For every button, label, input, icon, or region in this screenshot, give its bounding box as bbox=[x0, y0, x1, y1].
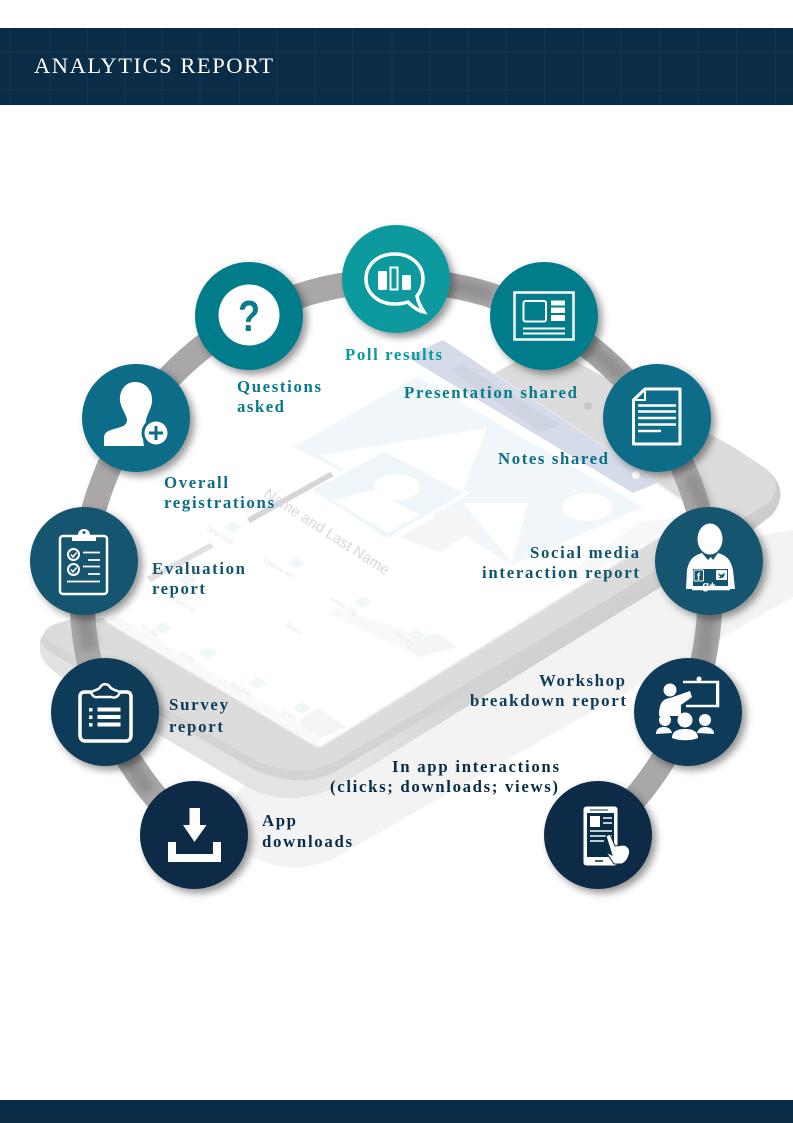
background phone illustration: Profile bbox=[139, 624, 160, 640]
label: downloads bbox=[262, 832, 352, 851]
background phone illustration: Action log bbox=[328, 596, 358, 617]
icon: question mark: ? bbox=[238, 292, 260, 341]
icon: speech bubble with bars bbox=[366, 254, 424, 312]
node: presentation shared bbox=[404, 262, 598, 402]
node: survey report bbox=[51, 658, 229, 766]
label: In app interactions bbox=[392, 757, 559, 776]
icon: document bbox=[634, 389, 680, 444]
label: Overall bbox=[164, 473, 228, 492]
label: registrations bbox=[164, 493, 274, 512]
label: Poll results bbox=[345, 345, 442, 364]
icon: presenter and audience bbox=[656, 676, 719, 740]
node: social media bbox=[482, 507, 763, 615]
label: Evaluation bbox=[152, 559, 246, 578]
label: (clicks; downloads; views) bbox=[330, 777, 558, 796]
label: breakdown report bbox=[470, 691, 626, 710]
node: notes shared bbox=[498, 364, 711, 472]
label bbox=[470, 671, 626, 710]
background phone illustration: Share bbox=[395, 632, 415, 647]
background phone illustration bbox=[40, 340, 793, 867]
background phone illustration: Agenda bbox=[229, 681, 253, 699]
label: Presentation shared bbox=[404, 383, 578, 402]
label: interaction report bbox=[482, 563, 639, 582]
label bbox=[262, 811, 352, 851]
background phone illustration: Notes bbox=[279, 708, 299, 723]
icon: checklist clipboard bbox=[60, 529, 107, 594]
node: app downloads bbox=[140, 781, 352, 889]
icon: slide layout bbox=[514, 292, 574, 340]
label bbox=[164, 473, 274, 512]
icon: person with laptop bbox=[686, 524, 735, 592]
header band bbox=[0, 28, 793, 105]
label: Notes shared bbox=[498, 449, 609, 468]
icon: survey clipboard bbox=[80, 684, 131, 741]
label: report bbox=[152, 579, 205, 598]
icon: person with plus bbox=[104, 382, 170, 448]
label: Survey bbox=[169, 695, 229, 714]
label bbox=[237, 377, 321, 416]
node: overall registrations bbox=[82, 364, 274, 512]
label: asked bbox=[237, 397, 285, 416]
label: App bbox=[262, 811, 296, 830]
background phone illustration: Polls bbox=[179, 651, 196, 665]
node: in app interactions bbox=[330, 757, 652, 889]
label: Questions bbox=[237, 377, 321, 396]
background phone illustration: Name and Last Name bbox=[261, 485, 392, 579]
ring connecting the circles bbox=[82, 281, 710, 835]
label: report bbox=[169, 717, 223, 736]
icon: person with laptop: g+ bbox=[702, 580, 716, 592]
background phone illustration: About bbox=[284, 622, 303, 637]
footer band bbox=[0, 1100, 793, 1123]
label bbox=[330, 757, 559, 796]
icon: question mark bbox=[218, 284, 280, 346]
label bbox=[482, 543, 640, 582]
background phone illustration: New Post bbox=[205, 526, 234, 547]
label: Social media bbox=[530, 543, 640, 562]
background phone illustration: Update info bbox=[262, 558, 297, 582]
label bbox=[169, 695, 229, 736]
icon: download bbox=[168, 808, 221, 862]
icon: phone with tapping hand bbox=[584, 806, 630, 866]
background phone illustration: Class at bbox=[171, 596, 196, 614]
icon: person with laptop: f bbox=[697, 572, 701, 583]
node: evaluation report bbox=[30, 507, 246, 615]
node: questions asked bbox=[195, 262, 321, 416]
title: ANALYTICS REPORT bbox=[34, 53, 273, 78]
node: poll results bbox=[342, 225, 450, 364]
node: workshop bbox=[470, 658, 742, 766]
label bbox=[152, 559, 246, 598]
label: Workshop bbox=[539, 671, 625, 690]
